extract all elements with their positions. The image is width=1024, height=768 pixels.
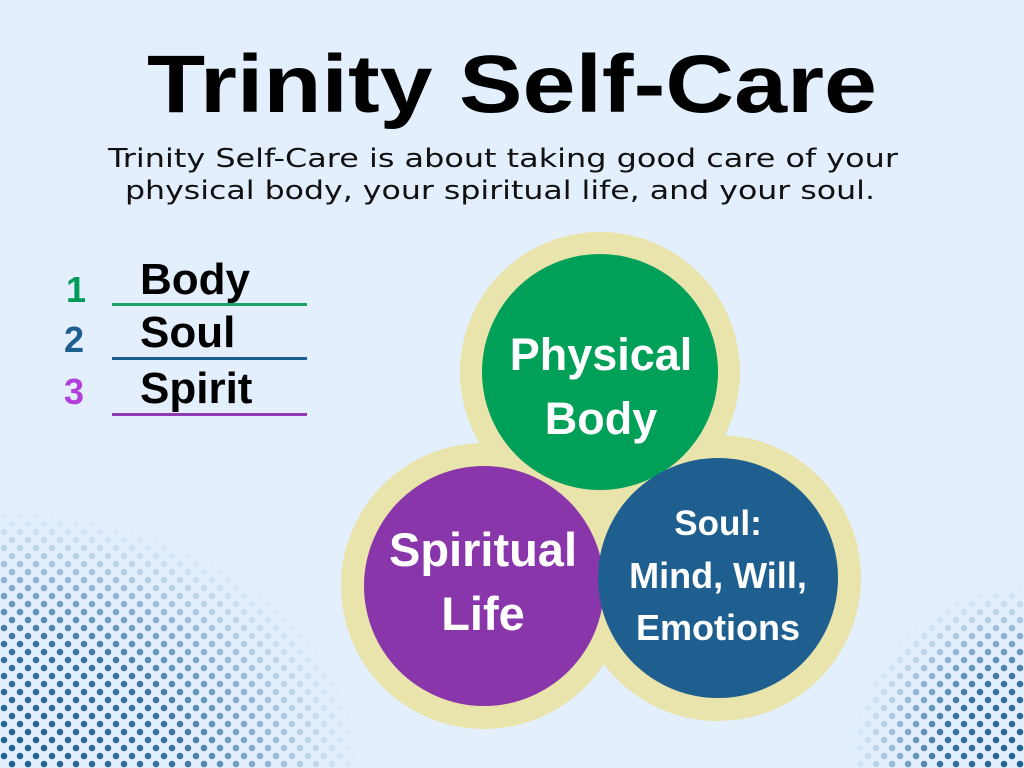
list: Soul (140, 308, 235, 357)
list: 2 (64, 319, 84, 360)
diagram: trinity circles: Soul: (674, 504, 762, 543)
list: Body (140, 255, 251, 304)
subtitle (107, 144, 898, 206)
list: Spirit (140, 364, 253, 413)
diagram: trinity circles: Physical (510, 329, 692, 380)
list: 3 (64, 371, 84, 412)
diagram: trinity circles: Life (441, 587, 525, 640)
diagram: trinity circles (341, 232, 861, 729)
title: Trinity Self-Care (147, 39, 877, 130)
diagram: trinity circles: Emotions (636, 607, 800, 648)
list (64, 255, 307, 416)
diagram: trinity circles: Mind, Will, (629, 555, 807, 596)
diagram: trinity circles: Spiritual (389, 523, 577, 576)
subtitle: physical body, your spiritual life, and your soul. (125, 176, 875, 206)
list: 1 (66, 269, 86, 310)
diagram: trinity circles: Body (545, 393, 657, 444)
subtitle: Trinity Self-Care is about taking good care of your (107, 144, 898, 174)
